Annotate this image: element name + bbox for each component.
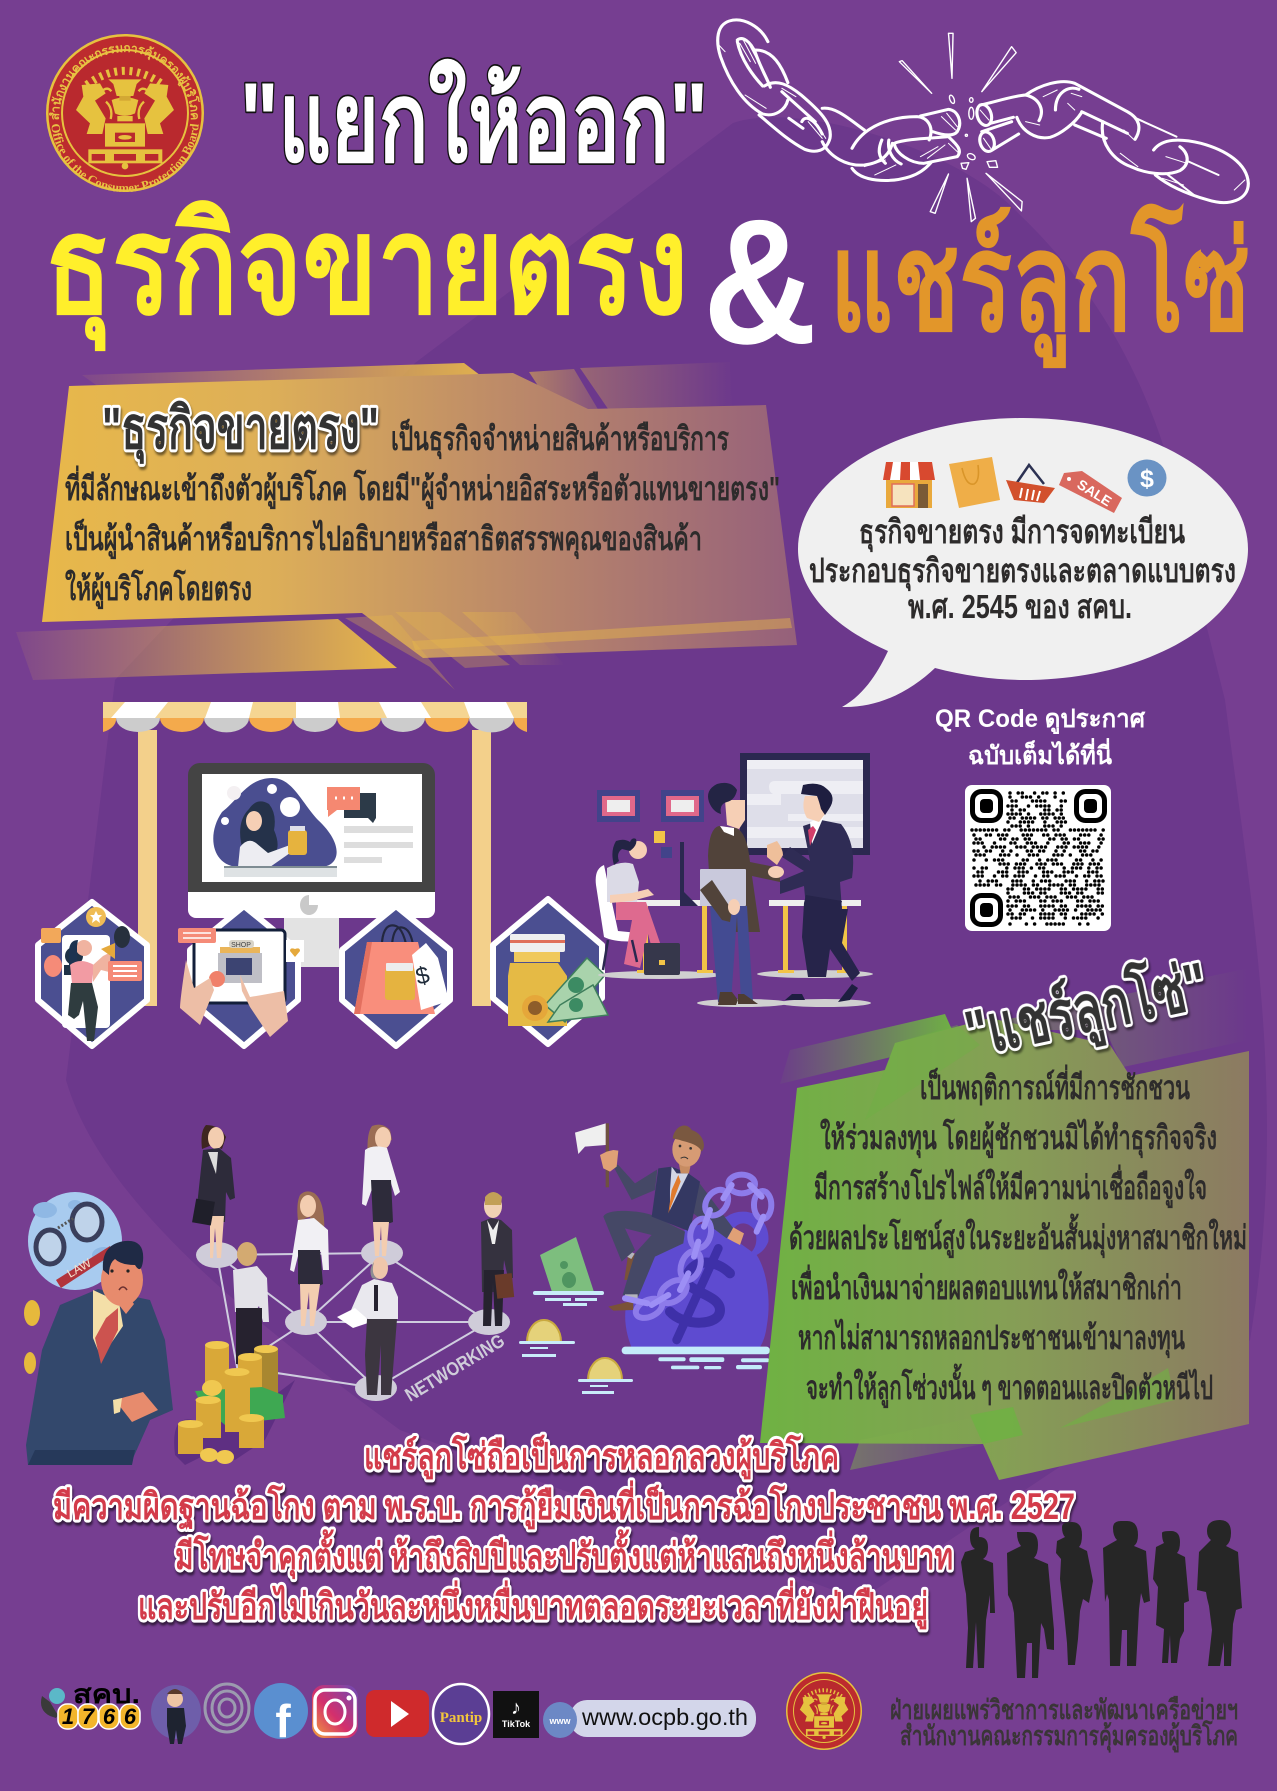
illustration: awning (103, 702, 527, 732)
illustration: monitor (188, 763, 435, 967)
text block: legal warning: มีโทษจำคุกตั้งแต่ ห้าถึงสิบปีและปรับตั้งแต่ห้าแสนถึงหนึ่งล้านบาท (175, 1529, 953, 1580)
text block: legal warning (53, 1433, 1075, 1630)
icon: shop (883, 462, 935, 508)
icon: dollar coin: $ (1140, 465, 1154, 493)
text block: legal warning: แชร์ลูกโซ่ถือเป็นการหลอกลวงผู้บริโภค (364, 1433, 839, 1480)
icon: hexagon shopping bag: $ (413, 961, 432, 991)
icon: law and handcuffs circle: LAW (64, 1255, 94, 1281)
icon: shopping bag (949, 457, 1000, 508)
text block: bubble (809, 513, 1236, 625)
footer: hotline 1766: 6 (124, 1704, 137, 1729)
icon: hexagon jar and money (493, 899, 608, 1044)
callout: speech bubble (798, 418, 1248, 707)
text block: description: เป็นผู้นำสินค้าหรือบริการไปอธิบายหรือสาธิตสรรพคุณของสินค้า (65, 518, 702, 560)
text block: QR caption: QR Code ดูประกาศ (935, 705, 1146, 735)
icon: hexagon influencer (38, 902, 147, 1046)
whiteboard (740, 753, 870, 855)
badge: website (543, 1700, 756, 1738)
person: man in dark suit with briefcase (481, 1192, 514, 1326)
text block: bubble: พ.ศ. 2545 ของ สคบ. (908, 588, 1132, 625)
person: woman in white blouse top (362, 1125, 400, 1256)
screen: product presenter (213, 778, 413, 877)
panel: ธุรกิจขายตรง description (16, 362, 797, 690)
label: NETWORKING: NETWORKING (402, 1331, 509, 1406)
icon: dollar coin (1128, 460, 1166, 496)
footer: hotline 1766: 7 (82, 1704, 96, 1729)
footer: hotline 1766: 6 (103, 1704, 116, 1729)
icon: pantip (433, 1684, 489, 1744)
illustration: people silhouettes (961, 1520, 1242, 1678)
illustration: sinking coins (519, 1320, 633, 1394)
background blob (66, 117, 1267, 1600)
text block: description: เป็นธุรกิจจำหน่ายสินค้าหรือบริการ (391, 418, 729, 460)
person: woman in center (290, 1191, 329, 1326)
man in suit (767, 784, 870, 1002)
text block: footer credit (890, 1695, 1238, 1753)
illustration: worried man in suit (24, 1241, 173, 1465)
icon: pantip: Pantip (440, 1710, 482, 1726)
illustration: office handshake (596, 753, 873, 1007)
logo: consumer protection board seal: สำนักงานคณะกรรมการคุ้มครองผู้บริโภค (49, 45, 200, 120)
footer: hotline 1766: สคบ. (73, 1679, 140, 1709)
text block: legal warning: และปรับอีกไม่เกินวันละหนึ่งหมื่นบาทตลอดระยะเวลาที่ยังฝ่าฝืนอยู่ (138, 1580, 928, 1630)
text block: description: ที่มีลักษณะเข้าถึงตัวผู้บริโภค โดยมี"ผู้จำหน่ายอิสระหรือตัวแทนขายตรง" (65, 465, 780, 510)
chart: network lines (217, 1253, 489, 1388)
heading: ampersand: & (703, 182, 817, 381)
QR code (965, 785, 1111, 931)
title: แยกให้ออก: "แยกให้ออก" (240, 59, 708, 185)
icon: grey emblem (205, 1684, 249, 1732)
person: older man with papers (337, 1257, 398, 1395)
desks (629, 900, 861, 973)
illustration: market stall posts (138, 730, 491, 1006)
icon: broken chain (718, 20, 1248, 222)
panel: แชร์ลูกโซ่ description (760, 946, 1249, 1480)
chart: network discs (196, 1240, 510, 1401)
person: woman in black suit (192, 1125, 235, 1258)
icon: hexagon shopping bag (342, 906, 450, 1046)
icon: facebook: f (275, 1695, 291, 1747)
floor shadows (598, 970, 873, 1007)
heading: ธุรกิจขายตรง: ธุรกิจขายตรง (45, 189, 688, 352)
logo: consumer protection board seal: Office of the Consumer Protection Board (52, 124, 199, 192)
icon: instagram (312, 1685, 358, 1738)
sub-heading: ธุรกิจขายตรง: "ธุรกิจขายตรง" (102, 396, 379, 465)
icon: hexagon online shop (178, 906, 304, 1046)
icon: law and handcuffs circle (28, 1192, 122, 1290)
icon: facebook (254, 1683, 308, 1747)
woman at desk (596, 838, 680, 975)
person: blond man from behind (233, 1242, 269, 1364)
illustration: coin stacks and cash (174, 1341, 295, 1465)
icon: tiktok: TikTok (502, 1719, 531, 1729)
icon: hexagon online shop: SHOP (231, 942, 251, 949)
icon: mascot (151, 1685, 201, 1744)
footer: hotline 1766: 1 (62, 1704, 74, 1729)
badge: website: www.ocpb.go.th (581, 1704, 748, 1730)
icon: sale tag: SALE (1074, 476, 1115, 509)
text block: QR caption (935, 705, 1146, 770)
icon: youtube (366, 1690, 429, 1737)
text block: description: ให้ผู้บริโภคโดยตรง (65, 569, 252, 610)
text block: pyramid description (789, 1064, 1247, 1409)
badge: website: www (548, 1716, 571, 1726)
icon: tiktok: ♪ (511, 1697, 521, 1719)
icon: sale tag (1059, 471, 1122, 513)
illustration: sinking banknote (533, 1237, 604, 1306)
text block: description (65, 418, 780, 610)
footer: hotline 1766 (41, 1679, 140, 1729)
illustration: man chained to money bag (575, 1123, 771, 1369)
logo: footer seal (786, 1672, 862, 1750)
icon: basket (1006, 465, 1055, 503)
computer (680, 842, 698, 906)
man with laptop (700, 783, 780, 1005)
wall posters (597, 790, 704, 858)
icon: tiktok (493, 1691, 539, 1738)
text block: QR caption: ฉบับเต็มได้ที่นี่ (968, 738, 1112, 770)
logo: consumer protection board seal (46, 34, 204, 192)
